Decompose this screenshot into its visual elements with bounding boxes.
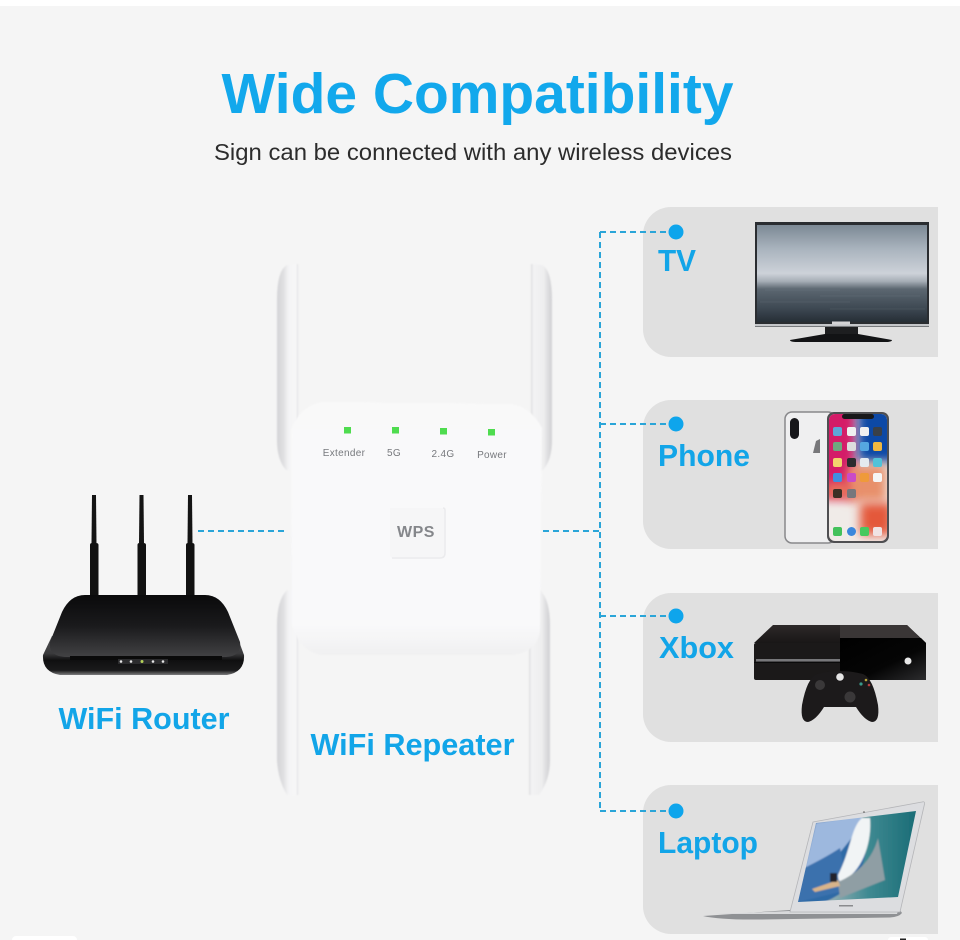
status labels bbox=[323, 448, 507, 461]
repeater body bbox=[291, 402, 542, 655]
status labels: 5G bbox=[387, 448, 401, 459]
label: Phone: Phone bbox=[658, 438, 750, 473]
label: Xbox: Xbox bbox=[659, 630, 735, 665]
panel: Phone bbox=[643, 400, 938, 549]
label: WiFi Repeater: WiFi Repeater bbox=[310, 728, 515, 762]
status lights bbox=[344, 427, 495, 436]
status labels: Extender bbox=[323, 448, 366, 459]
panel: TV bbox=[643, 207, 938, 357]
icon: laptop bbox=[703, 802, 925, 920]
label: WiFi Router: WiFi Router bbox=[58, 702, 230, 736]
icon: game console and controller bbox=[754, 625, 926, 722]
panel: Laptop bbox=[643, 785, 938, 934]
icon: smartphone bbox=[784, 411, 889, 544]
repeater antennas bbox=[277, 264, 552, 795]
status labels: Power bbox=[477, 450, 507, 461]
status labels: 2.4G bbox=[432, 449, 454, 460]
WPS button bbox=[390, 508, 445, 558]
panel: Xbox bbox=[643, 593, 938, 742]
label: Laptop: Laptop bbox=[658, 825, 758, 860]
title: Wide Compatibility bbox=[222, 62, 734, 126]
icon: WiFi router bbox=[43, 495, 244, 675]
dashed connectors bbox=[198, 232, 676, 811]
connector dots bbox=[668, 224, 684, 818]
icon: television bbox=[755, 222, 929, 342]
icon: WiFi repeater bbox=[277, 264, 552, 795]
subtitle: Sign can be connected with any wireless devices bbox=[214, 139, 732, 165]
WPS button: WPS bbox=[397, 524, 435, 541]
label: TV: TV bbox=[658, 243, 696, 278]
